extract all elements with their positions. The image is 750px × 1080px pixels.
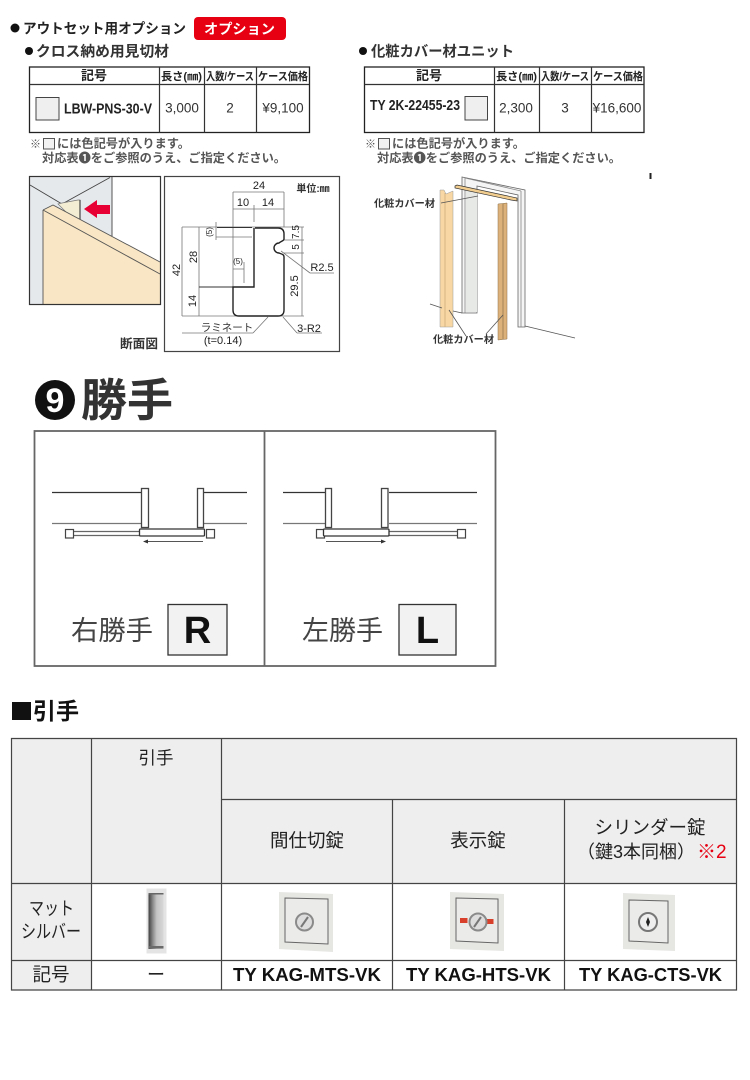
diagram: left hand <box>283 488 477 544</box>
caption: cross section: 断面図 <box>120 337 158 351</box>
diagram: trim cross section: 3-R2 <box>297 323 321 335</box>
diagram: trim cross section: 14 <box>262 197 274 209</box>
illustration: trim installed on door <box>30 176 160 304</box>
table: cross trim: 入数/ケース <box>206 69 254 83</box>
table: cross trim: 記号 <box>81 68 107 83</box>
table: pull handle and locks: 表示錠 <box>450 830 506 851</box>
icon: red arrow <box>84 200 110 218</box>
heading: handing <box>35 375 173 426</box>
diagram: trim cross section: 7.5 <box>291 225 302 239</box>
label: right hand: 右勝手 <box>71 616 153 646</box>
table: pull handle and locks <box>12 738 736 990</box>
diagram: trim cross section: R2.5 <box>310 262 334 274</box>
diagram: right hand <box>52 488 247 544</box>
diagram: trim cross section: 24 <box>253 180 265 192</box>
table: pull handle and locks: 引手 <box>138 748 174 768</box>
table: pull handle and locks: ー <box>147 965 165 985</box>
table: decorative cover unit: ケース価格 <box>593 69 643 83</box>
label: cover material lower: 化粧カバー材 <box>433 333 494 346</box>
table: decorative cover unit: ¥16,600 <box>592 100 641 116</box>
heading: decorative cover unit: 化粧カバー材ユニット <box>371 42 514 60</box>
badge: option <box>194 17 286 40</box>
note: decorative cover unit: には色記号が入ります。 <box>392 136 525 150</box>
table: pull handle and locks: TY KAG-MTS-VK <box>233 965 381 985</box>
table: pull handle and locks: TY KAG-HTS-VK <box>406 965 551 985</box>
label: left hand: 左勝手 <box>302 616 383 646</box>
note: cross trim: には色記号が入ります。 <box>57 136 190 150</box>
diagram: trim cross section: 42 <box>171 264 183 276</box>
heading: handing: 勝手 <box>81 375 173 426</box>
table: cross trim: ¥9,100 <box>261 100 304 116</box>
note: decorative cover unit: ※ <box>365 138 376 150</box>
table: decorative cover unit: 3 <box>561 100 569 116</box>
image: privacy lock <box>279 892 333 952</box>
heading: cross trim: クロス納め用見切材 <box>36 44 170 60</box>
diagram: trim cross section: 29.5 <box>289 275 301 297</box>
diagram: trim cross section: 28 <box>188 251 200 263</box>
diagram: trim cross section: (t=0.14) <box>204 335 242 347</box>
table: decorative cover unit: 記号 <box>416 68 442 83</box>
diagram: trim cross section: 10 <box>237 197 249 209</box>
label: right hand <box>71 604 227 655</box>
heading: handing: 9 <box>46 382 64 420</box>
diagram: trim cross section: 単位:㎜ <box>296 182 330 195</box>
label: left hand: L <box>416 610 439 652</box>
note: decorative cover unit <box>365 136 621 165</box>
table: cross trim: 3,000 <box>165 100 199 116</box>
image: indicator lock <box>450 892 504 951</box>
table: cross trim: 2 <box>226 100 234 116</box>
heading: outset option: アウトセット用オプション <box>23 20 186 36</box>
table: pull handle and locks: 記号 <box>32 964 70 985</box>
label: cover material upper: 化粧カバー材 <box>374 197 435 210</box>
diagram: trim cross section: 5 <box>291 244 302 250</box>
panel: handing diagrams frame <box>34 431 496 666</box>
table: pull handle and locks: （鍵3本同梱）※2 <box>577 842 727 863</box>
table: cross trim: LBW-PNS-30-V <box>64 100 152 118</box>
diagram: trim cross section <box>164 176 340 352</box>
note: cross trim: ※ <box>30 138 41 150</box>
heading: pull handle: 引手 <box>33 698 79 724</box>
diagram: trim cross section: (5) <box>205 227 214 237</box>
table: cross trim: ケース価格 <box>258 69 308 83</box>
table: decorative cover unit: 2,300 <box>499 100 533 116</box>
table: decorative cover unit <box>364 67 644 132</box>
note: cross trim <box>30 136 286 165</box>
table: pull handle and locks: シルバー <box>21 921 81 942</box>
table: decorative cover unit: 入数/ケース <box>541 69 589 83</box>
heading: pull handle <box>12 698 79 724</box>
note: decorative cover unit: 対応表❶をご参照のうえ、ご指定ください。 <box>377 150 621 165</box>
image: cylinder lock <box>623 893 675 951</box>
table: cross trim: 長さ(㎜) <box>161 70 202 83</box>
table: pull handle and locks: シリンダー錠 <box>594 817 706 838</box>
label: left hand <box>302 604 456 655</box>
table: decorative cover unit: 長さ(㎜) <box>496 70 537 83</box>
table: decorative cover unit: TY 2K-22455-23 <box>370 97 460 114</box>
table: pull handle and locks: 間仕切錠 <box>270 830 344 851</box>
table: cross trim <box>30 67 310 132</box>
label: right hand: R <box>184 610 211 652</box>
diagram: trim cross section: ラミネート <box>201 322 253 334</box>
badge: option: オプション <box>204 21 275 37</box>
diagram: trim cross section: (5) <box>233 257 243 266</box>
diagram: trim cross section: 14 <box>187 295 199 307</box>
table: pull handle and locks: TY KAG-CTS-VK <box>579 965 722 985</box>
image: pull handle <box>146 888 166 954</box>
illustration: door frame with cover pieces <box>374 177 575 346</box>
table: pull handle and locks: マット <box>29 898 74 919</box>
note: cross trim: 対応表❶をご参照のうえ、ご指定ください。 <box>42 150 286 165</box>
